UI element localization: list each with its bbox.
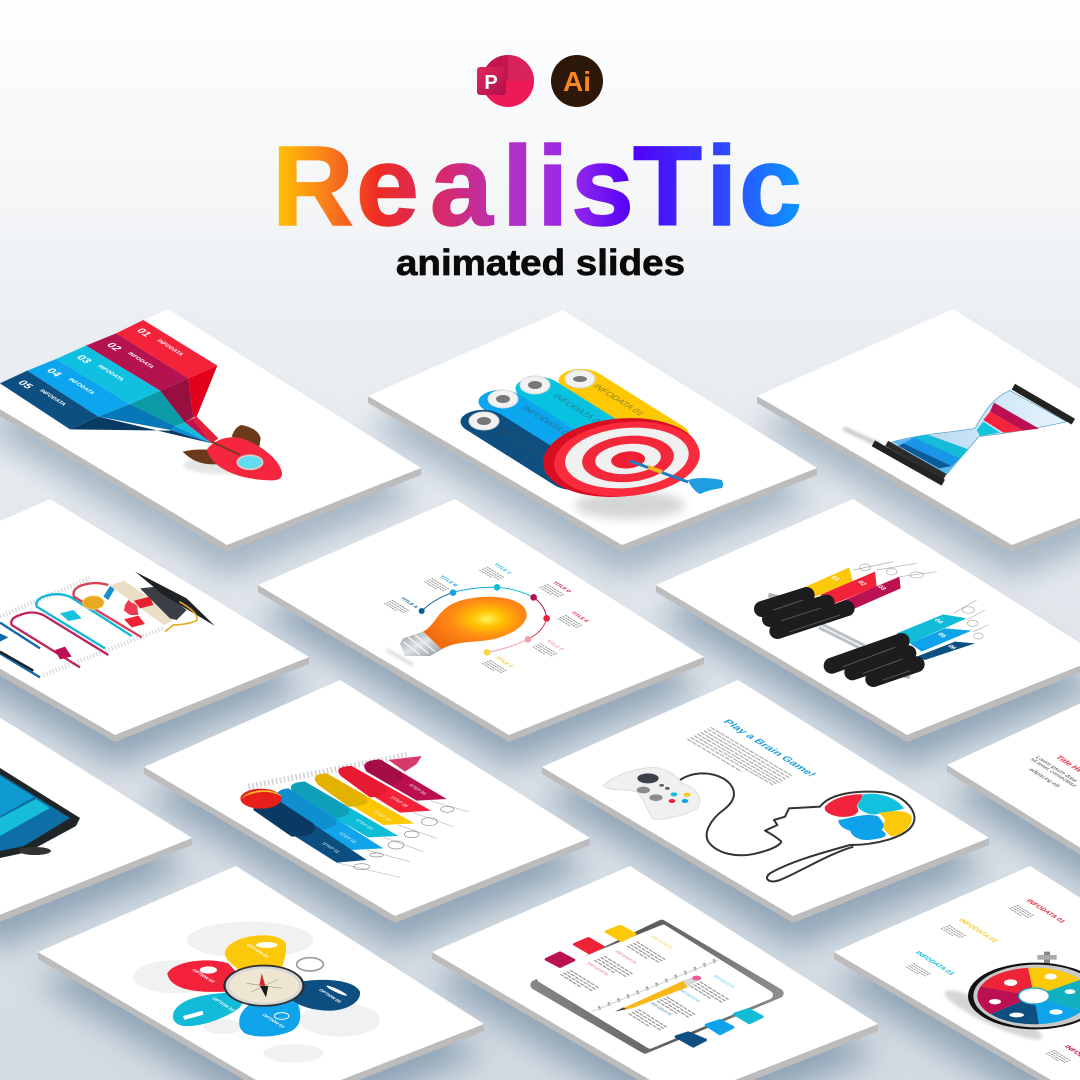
- column headings: INFODATA: [677, 988, 702, 1003]
- petal labels: OPTION 02: [191, 968, 216, 984]
- icon: PowerPoint: P: [484, 72, 498, 94]
- step labels: STEP 02: [337, 832, 358, 844]
- subtitle: animated slides: [396, 242, 685, 283]
- band labels: INFODATA: [38, 389, 67, 407]
- band labels: INFODATA: [96, 364, 125, 382]
- step labels: STEP 03: [354, 818, 375, 830]
- band labels: 05: [15, 379, 36, 390]
- petal cyan: [173, 990, 250, 1026]
- petal labels: OPTION 01: [245, 943, 271, 959]
- light bulb diagram: [384, 563, 591, 674]
- wheel icons: [989, 974, 1075, 1017]
- tags: [55, 647, 72, 659]
- notebook diagram: [535, 924, 779, 1049]
- band numbers: 03: [876, 585, 888, 591]
- rim: [968, 963, 1080, 1029]
- slide: barbell: [656, 499, 1080, 742]
- band labels: 02: [103, 341, 124, 353]
- band 4: [451, 405, 605, 495]
- title: RealisTic: [272, 123, 802, 249]
- weight highlights: [773, 600, 910, 680]
- step labels: STEP 01: [321, 842, 341, 854]
- slide: rocket: [0, 309, 421, 552]
- wheel: [977, 968, 1080, 1024]
- band labels: 03: [73, 354, 94, 365]
- band blue: [276, 788, 383, 850]
- column headings: INFODATA: [614, 950, 639, 965]
- slide: target: [368, 310, 817, 552]
- wire: [680, 773, 782, 855]
- graduation cap: [135, 572, 215, 632]
- end icons: [337, 801, 468, 877]
- labels: INFODATA 02: [957, 918, 999, 944]
- step labels: STEP 05: [389, 796, 410, 808]
- icon: Illustrator: Ai: [563, 66, 591, 97]
- brain puzzle: [825, 794, 912, 840]
- icon: bulb glass: [423, 597, 527, 649]
- text blocks: [384, 567, 583, 674]
- petal yellow: [225, 935, 286, 978]
- ball: [240, 789, 282, 809]
- labels: TITLE F: [544, 639, 565, 652]
- band labels: INFODATA 03: [519, 405, 576, 439]
- icon: hourglass: [843, 387, 1073, 483]
- page: [541, 929, 769, 1044]
- band labels: INFODATA 02: [550, 393, 607, 427]
- hub: [1019, 988, 1049, 1004]
- labels: INFODATA 01: [1024, 899, 1067, 924]
- icon: pencil: [615, 976, 701, 1012]
- slide: spinner: [834, 866, 1080, 1080]
- nodes: [419, 584, 550, 656]
- slide: compass: [38, 866, 484, 1080]
- band labels: INFODATA: [66, 378, 96, 395]
- header icons: [477, 55, 603, 107]
- slide: tablet: [0, 680, 192, 923]
- heading: Play a Brain Game!: [720, 718, 818, 778]
- compass diagram: [133, 922, 380, 1063]
- band numbers: 05: [936, 632, 948, 639]
- petal labels: OPTION 05: [317, 988, 343, 1004]
- band labels: 01: [133, 327, 154, 338]
- crown: [1037, 952, 1057, 967]
- column headings: INFODATA: [650, 935, 675, 950]
- doodles: [0, 578, 163, 675]
- bands with target: [451, 364, 723, 519]
- tabs: [546, 926, 762, 1046]
- column headings: INFODATA: [712, 974, 737, 989]
- weights: [762, 595, 917, 679]
- band numbers: [829, 575, 958, 651]
- icon: rocket: [183, 425, 282, 480]
- slide: light bulb: [258, 499, 704, 742]
- petal labels: OPTION 04: [261, 1013, 286, 1029]
- doodles: [248, 755, 407, 787]
- band numbers: 04: [932, 618, 945, 625]
- band labels: INFODATA: [126, 352, 155, 369]
- icon: controller: [603, 767, 700, 819]
- labels: TITLE B: [438, 575, 459, 588]
- labels: TITLE C: [492, 563, 513, 575]
- arc timeline: [422, 587, 547, 652]
- petal icons: [183, 942, 348, 1020]
- label text: [906, 905, 1071, 1064]
- icon row: [853, 562, 988, 639]
- band labels: [495, 383, 647, 461]
- band labels: INFODATA: [155, 339, 184, 357]
- brain game diagram: [603, 718, 914, 881]
- cover: [535, 924, 779, 1049]
- ring: [297, 958, 323, 971]
- head outline: [765, 792, 914, 881]
- petal red: [167, 960, 247, 992]
- band numbers: 02: [856, 580, 868, 587]
- slide: brain game: [542, 680, 989, 923]
- step labels: [321, 783, 428, 854]
- step labels: STEP 06: [407, 783, 428, 795]
- band numbers: 06: [946, 644, 958, 651]
- band 2: [506, 372, 660, 462]
- body text: [687, 727, 792, 785]
- shadow: [941, 983, 1046, 1047]
- slide: notebook: [432, 866, 878, 1080]
- labels: TITLE A: [398, 597, 420, 609]
- lower bands: [897, 614, 975, 660]
- column headings: [586, 935, 737, 1017]
- column text: [560, 942, 729, 1032]
- title here text: adipiscing elit: [1027, 768, 1061, 788]
- icon: bulb base: [400, 632, 442, 656]
- icon: target: [540, 412, 703, 503]
- band magenta: [364, 759, 447, 801]
- labels: TITLE G: [493, 656, 515, 669]
- rocket funnel chart: [0, 320, 282, 480]
- band icons: [469, 370, 595, 430]
- petal navy: [287, 980, 360, 1011]
- spinner diagram: [906, 899, 1080, 1070]
- slide shadows: lower rows: [0, 529, 1080, 1080]
- pencil tip: [388, 756, 422, 772]
- graduation timeline: [0, 572, 215, 677]
- spiral: [598, 960, 717, 1008]
- band labels: INFODATA 04: [495, 427, 552, 461]
- slide: steps: [144, 680, 590, 923]
- stacked bands: [240, 755, 468, 877]
- labels: TITLE E: [569, 611, 591, 624]
- world map: [133, 922, 380, 1063]
- band 3: [469, 385, 627, 477]
- labels: [913, 899, 1080, 1070]
- band yellow: [315, 773, 414, 825]
- slide: title here: [947, 678, 1080, 923]
- band labels: 04: [43, 367, 64, 378]
- petal labels: OPTION 03: [211, 997, 236, 1012]
- slide: graduation: [0, 499, 309, 742]
- title here text: Lorem ipsum dolor: [1034, 756, 1079, 783]
- column headings: INFODATA: [586, 962, 611, 977]
- bar: [768, 595, 910, 677]
- tablet screen: [0, 768, 80, 858]
- band numbers: 01: [829, 575, 842, 582]
- band navy: [253, 802, 367, 863]
- loops: [0, 583, 142, 677]
- slide shadows: top row: [0, 339, 1080, 578]
- icon: dart: [630, 461, 723, 494]
- column headings: INFODATA: [649, 1002, 674, 1017]
- petal blue: [239, 995, 300, 1037]
- scroll: [112, 582, 176, 624]
- band cyan: [291, 782, 398, 837]
- target shadow: [575, 491, 685, 519]
- band red: [338, 766, 431, 813]
- barbell diagram: [762, 562, 988, 680]
- title here text: sit amet, consectetur: [1028, 758, 1078, 788]
- upper bands: [802, 567, 901, 608]
- medal: [83, 586, 115, 609]
- band labels: INFODATA 01: [590, 383, 647, 417]
- petal labels: [191, 943, 343, 1029]
- labels: TITLE D: [551, 581, 573, 594]
- icon: compass: [223, 965, 305, 1007]
- band labels: [15, 327, 184, 407]
- labels: INFODATA 03: [913, 951, 956, 976]
- band 1: [549, 364, 698, 451]
- labels: [398, 563, 591, 669]
- slide: hourglass: [757, 309, 1080, 552]
- step labels: STEP 04: [372, 810, 393, 822]
